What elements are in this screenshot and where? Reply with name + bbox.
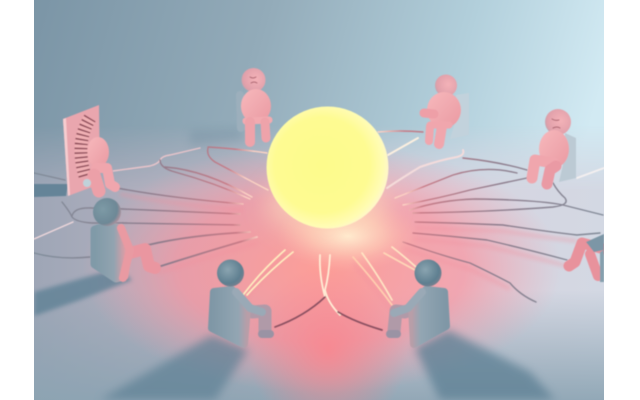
- figure: front centre right: [390, 260, 446, 344]
- sphere halo: [261, 188, 394, 240]
- figure: right: [532, 109, 576, 184]
- floor shadows: [34, 128, 555, 400]
- glowing sphere: [266, 106, 388, 228]
- right wires: [378, 131, 604, 302]
- wire reflections on the floor: [120, 192, 576, 289]
- figure: far right cropped: [569, 234, 604, 282]
- wires connecting figures to the sphere: [34, 131, 604, 330]
- left wires: [34, 147, 268, 267]
- figure: front left side: [93, 198, 155, 278]
- figure: spine panel: [63, 105, 115, 196]
- front wires: [243, 247, 416, 330]
- figure: front centre left: [212, 260, 270, 344]
- figure: top centre: [240, 68, 271, 142]
- figure: top right: [424, 74, 469, 144]
